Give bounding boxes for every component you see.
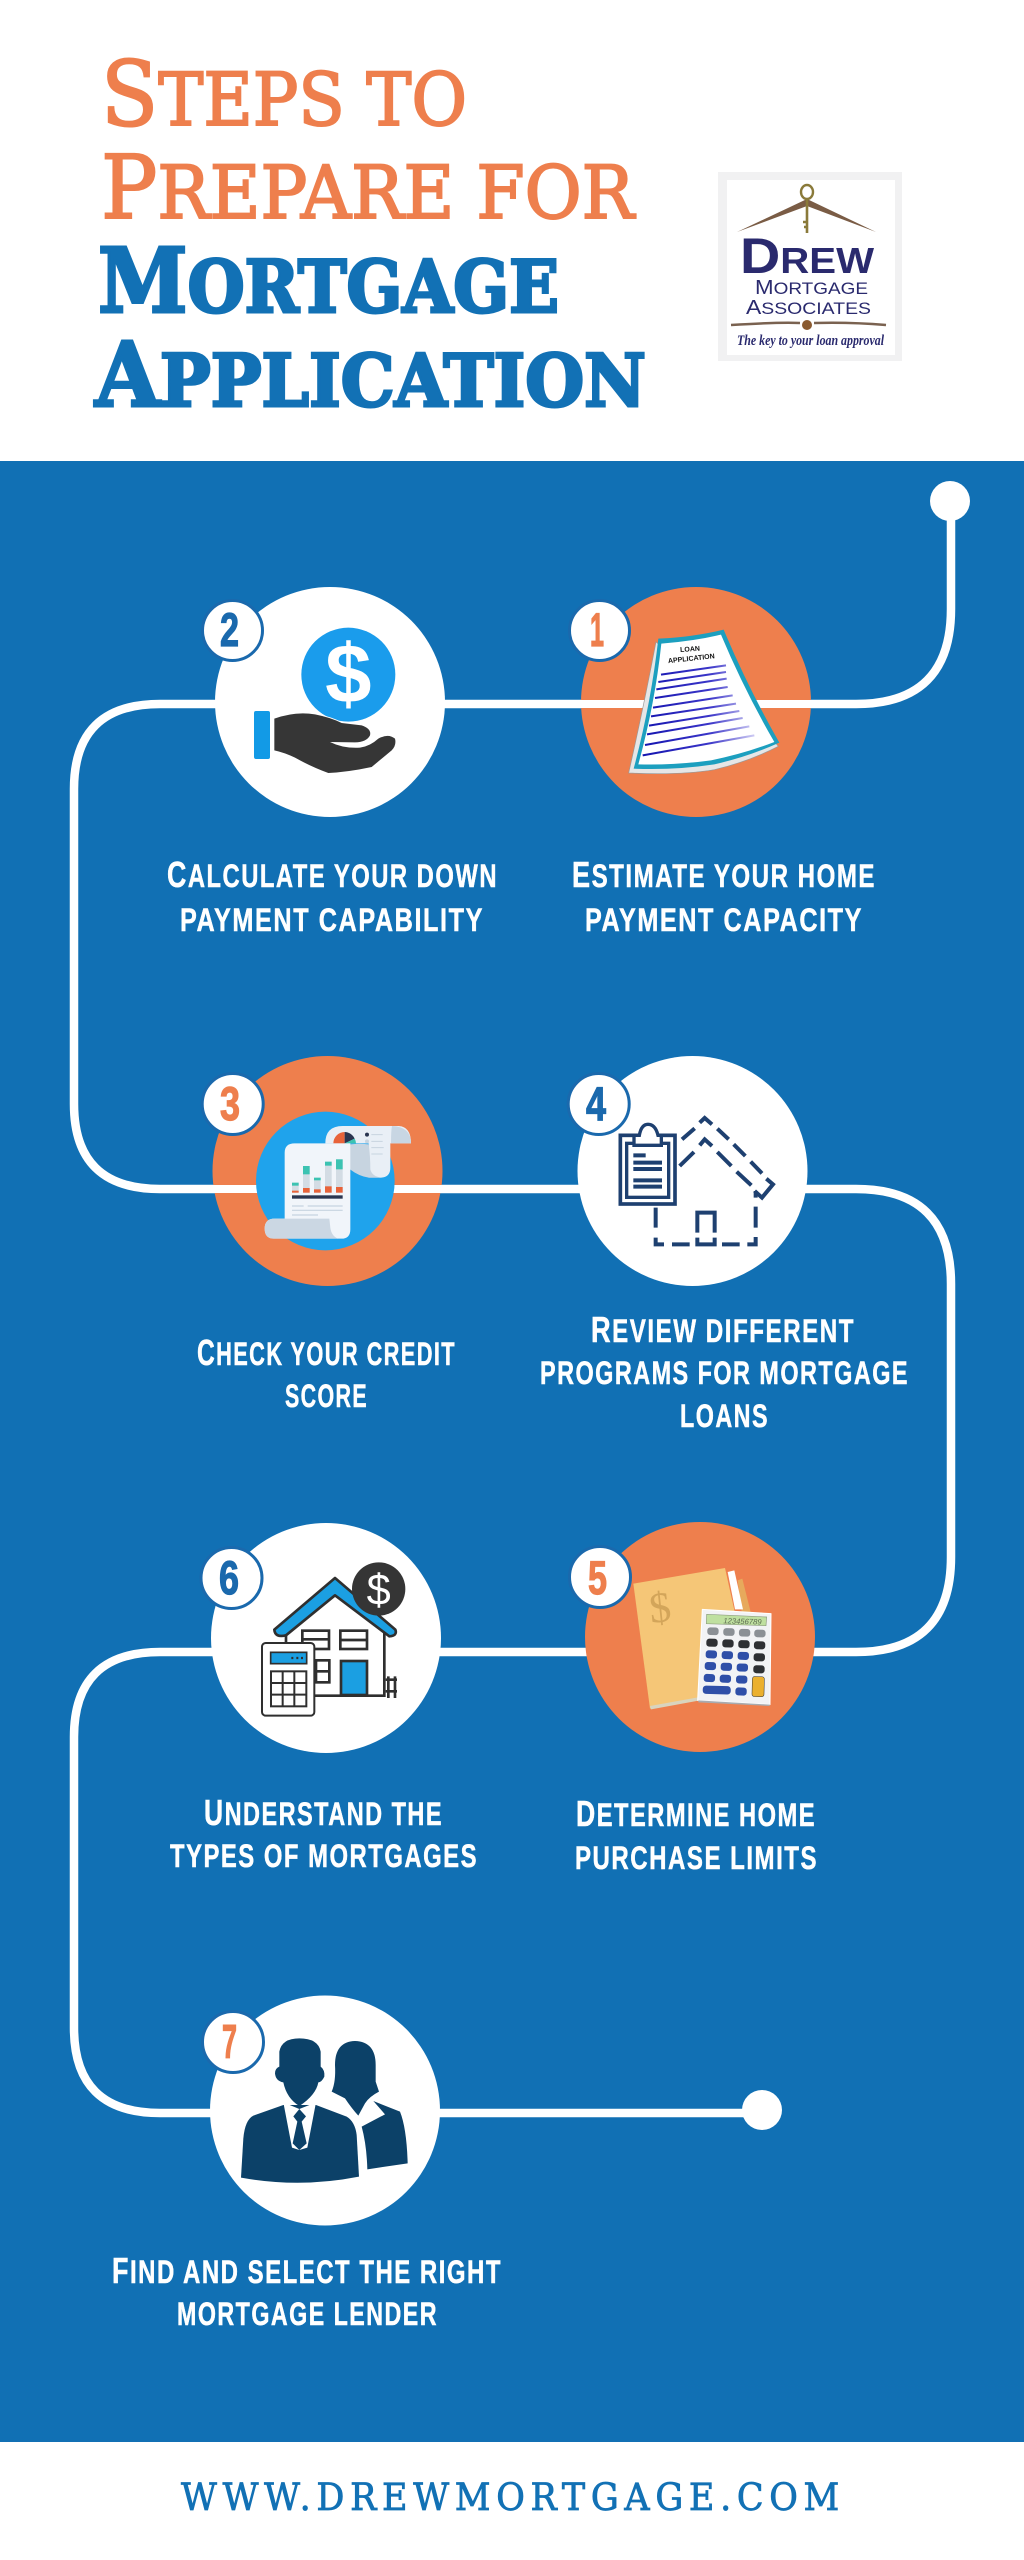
badge: number 6	[201, 1548, 262, 1608]
title line: Steps to: STEPS TO	[101, 42, 467, 147]
panel: blue background	[0, 461, 1024, 2442]
icon: hand holding coin	[254, 627, 395, 773]
label: step 3: CHECK YOUR CREDIT	[197, 1332, 456, 1373]
label: step 7: FIND AND SELECT THE RIGHT	[112, 2250, 502, 2291]
icon: loan application document: LOAN	[680, 646, 700, 654]
footer: website: WWW.DREWMORTGAGE.COM	[181, 2476, 845, 2519]
badge: number 2: 2	[220, 603, 239, 656]
title line: Prepare for: PREPARE FOR	[101, 136, 636, 239]
step 4	[540, 1056, 909, 1434]
badge: number 5: 5	[588, 1551, 607, 1604]
badge: number 7	[202, 2012, 264, 2072]
title line: Application: APPLICATION	[94, 322, 646, 427]
label: step 1: PAYMENT CAPACITY	[585, 902, 863, 938]
icon: folder and calculator: $	[647, 1583, 673, 1633]
step 3	[197, 1056, 456, 1414]
step 1	[570, 587, 876, 938]
label: step 4	[540, 1309, 909, 1434]
badge: number 6: 6	[219, 1551, 239, 1604]
label: step 4: REVIEW DIFFERENT	[591, 1309, 855, 1350]
label: step 7: MORTGAGE LENDER	[177, 2296, 438, 2332]
label: step 5	[575, 1793, 818, 1876]
label: step 5: PURCHASE LIMITS	[575, 1840, 818, 1876]
label: step 5: DETERMINE HOME	[576, 1793, 816, 1834]
label: step 2: PAYMENT CAPABILITY	[180, 902, 484, 938]
label: step 2: CALCULATE YOUR DOWN	[167, 854, 498, 895]
step 2	[167, 587, 498, 938]
badge: number 1	[570, 600, 630, 660]
step 5	[570, 1522, 818, 1876]
icon: two business people	[241, 2038, 408, 2183]
icon: loan application document: APPLICATION	[668, 653, 715, 665]
title line: Mortgage: MORTGAGE	[98, 228, 559, 333]
badge: number 7: 7	[222, 2015, 237, 2068]
step 7	[112, 1996, 502, 2332]
logo: Drew Mortgage Associates: ASSOCIATES	[746, 297, 871, 319]
icon: credit report	[256, 1112, 411, 1250]
logo: Drew Mortgage Associates	[718, 172, 902, 361]
badge: number 2	[202, 600, 262, 660]
label: step 6: TYPES OF MORTGAGES	[170, 1838, 478, 1874]
label: step 4: LOANS	[680, 1398, 769, 1434]
label: step 1	[572, 854, 876, 938]
label: step 6: UNDERSTAND THE	[204, 1792, 443, 1833]
badge: number 4	[568, 1074, 629, 1134]
icon: folder and calculator: 123456789	[723, 1616, 763, 1627]
step 6	[170, 1523, 478, 1874]
logo: Drew Mortgage Associates: MORTGAGE	[755, 277, 868, 299]
connector path with start and end dots	[74, 481, 970, 2130]
label: step 7	[112, 2250, 502, 2332]
title	[94, 42, 646, 427]
badge: number 3	[202, 1074, 263, 1134]
label: step 1: ESTIMATE YOUR HOME	[572, 854, 876, 895]
label: step 2	[167, 854, 498, 938]
label: step 3: SCORE	[285, 1378, 368, 1414]
icon: hand holding coin: $	[325, 627, 372, 720]
icon: dashed house and clipboard	[620, 1118, 773, 1244]
icon: house, calculator and dollar coin: $	[367, 1567, 391, 1615]
badge: number 4: 4	[586, 1077, 606, 1130]
icon: folder and calculator	[633, 1568, 771, 1709]
logo: Drew Mortgage Associates: DREW	[740, 228, 874, 284]
logo: Drew Mortgage Associates: The key to your loan approval	[737, 333, 885, 349]
badge: number 1: 1	[590, 603, 604, 656]
badge: number 5	[570, 1546, 630, 1608]
icon: house, calculator and dollar coin	[262, 1562, 405, 1716]
label: step 6	[170, 1792, 478, 1874]
icon: loan application document	[629, 630, 779, 774]
label: step 3	[197, 1332, 456, 1414]
badge: number 3: 3	[220, 1077, 240, 1130]
